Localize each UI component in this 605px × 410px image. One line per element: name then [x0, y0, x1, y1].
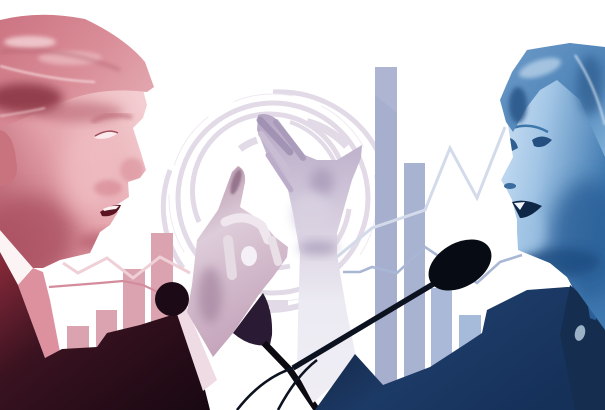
- eye: [94, 130, 118, 139]
- eyes: [532, 136, 552, 147]
- right speaker face: [500, 43, 605, 330]
- concentric ring chart: [163, 92, 377, 310]
- left speaker ear: [0, 130, 17, 186]
- left speaker tie: [18, 268, 60, 358]
- right speaker suit: [315, 287, 605, 410]
- mouth: [100, 205, 121, 216]
- brooch: [573, 324, 587, 342]
- right speaker neck: [520, 200, 605, 325]
- rear microphone head and stem: [233, 293, 317, 410]
- left speaker cuff: [177, 308, 217, 391]
- nostril: [504, 183, 516, 189]
- figure: left speaker: [0, 15, 217, 410]
- left speaker suit: [0, 252, 210, 410]
- left speaker face: [0, 78, 147, 275]
- left microphone head: [155, 282, 189, 316]
- front microphone head: [420, 229, 500, 301]
- left speaker hair: [0, 15, 154, 128]
- left speaker shirt collar: [0, 226, 33, 285]
- finger loop opening: [241, 246, 257, 266]
- left bar chart: [67, 233, 173, 356]
- right hand and forearm: [257, 114, 362, 403]
- right line chart: [337, 127, 522, 283]
- figure: right speaker: [315, 43, 605, 410]
- microphone stalks and cables: [237, 283, 435, 410]
- right speaker hair: [500, 43, 605, 157]
- right bar chart: [375, 67, 481, 387]
- mouth: [512, 201, 542, 218]
- left hand making OK gesture: [187, 166, 288, 357]
- left line chart: [49, 257, 190, 293]
- right speaker blouse collar: [560, 285, 605, 410]
